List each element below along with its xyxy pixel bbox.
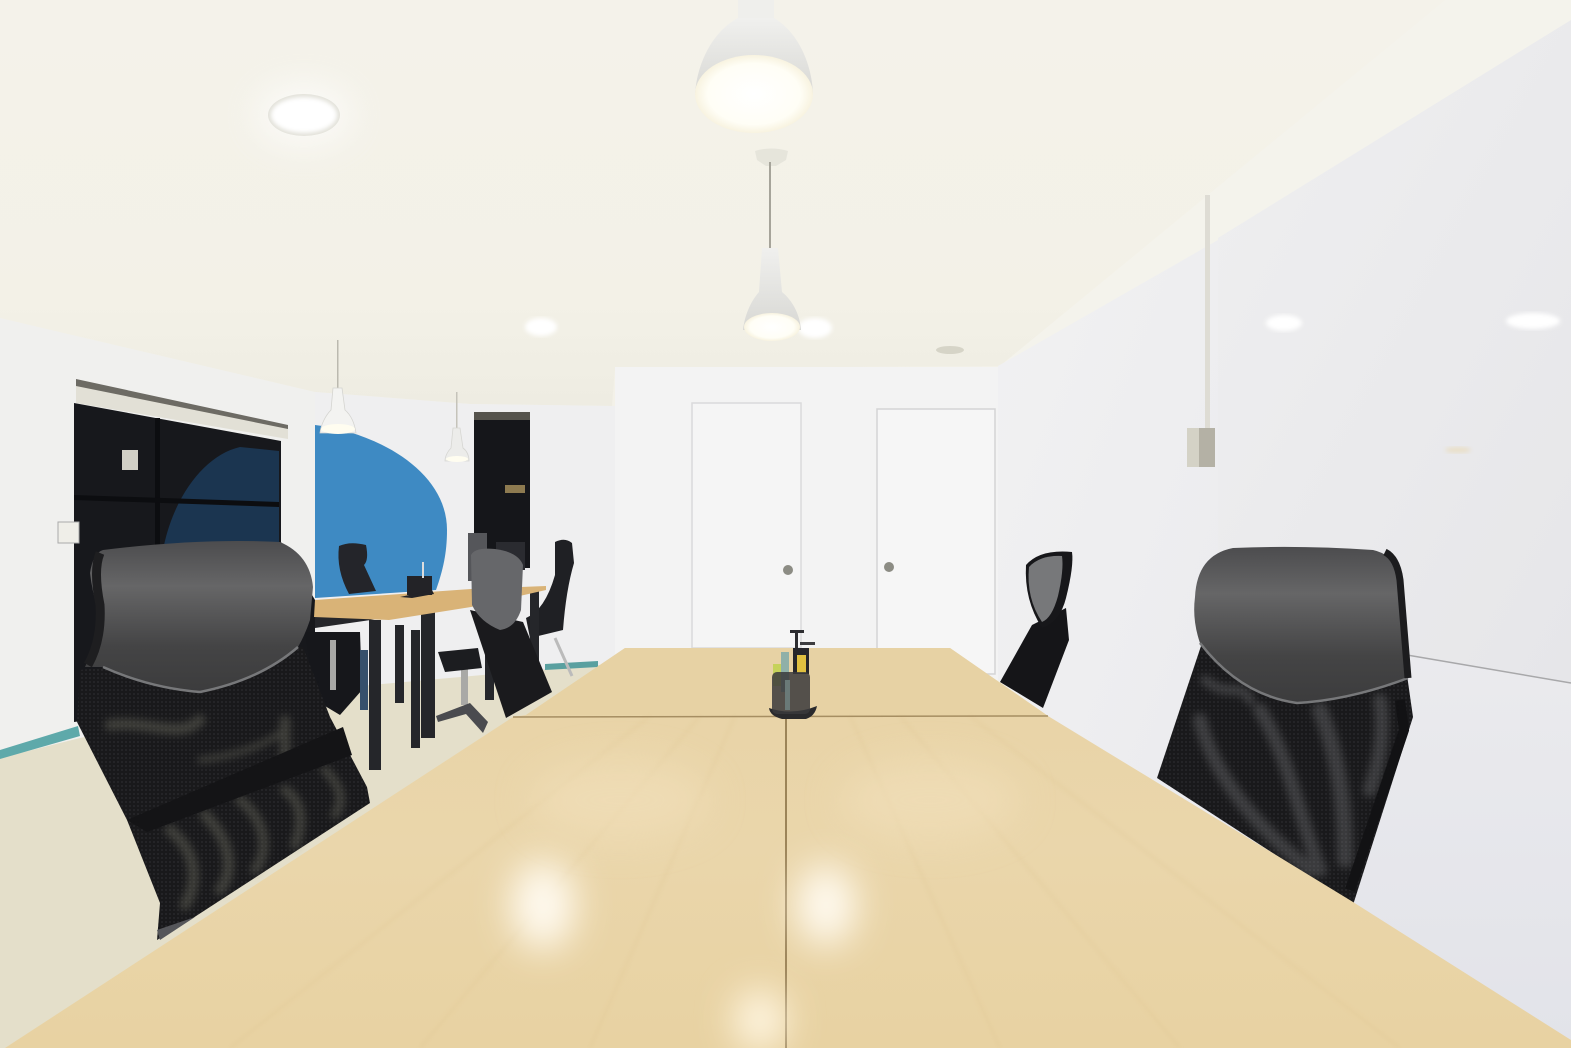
chair: near left [77, 541, 370, 940]
chair headrest rim [1200, 643, 1408, 703]
door: right [877, 409, 995, 674]
pendant lamp: rear [445, 392, 469, 462]
rear chair: right [526, 540, 574, 676]
whiteboard [1218, 20, 1571, 683]
pen holder: rear table [400, 562, 434, 598]
door: left [692, 403, 801, 648]
pendant lamp: left near [320, 340, 356, 434]
back wall with doors [615, 367, 998, 680]
pendant lamp: top [695, 0, 813, 133]
teal skirting [0, 726, 80, 759]
conduit and wall socket [1187, 195, 1215, 467]
chair headrest [1194, 547, 1408, 703]
rear left wall [315, 392, 615, 690]
chair: far right [1000, 552, 1072, 708]
left wall [0, 318, 315, 760]
table legs [315, 590, 539, 770]
whiteboard reflections [1266, 313, 1560, 453]
chair headrest side [1385, 552, 1408, 678]
rear table and chairs [305, 533, 574, 770]
floor [0, 665, 600, 1048]
pen holder [769, 630, 817, 719]
chair band [127, 727, 352, 832]
chair under table: left [305, 632, 368, 715]
rear table top [314, 586, 546, 620]
chair headrest [85, 541, 313, 692]
chair mesh back [77, 647, 370, 940]
chair: near right [1157, 547, 1413, 905]
lower right wall [1218, 622, 1571, 1048]
chair headrest rim [103, 647, 298, 692]
table joints [513, 716, 1048, 1048]
table reflections [511, 760, 1020, 1048]
right wall [998, 240, 1218, 860]
chair mesh back [1157, 640, 1413, 905]
table top [5, 648, 1571, 1048]
rear monitor and far chair [468, 533, 525, 581]
chair frame edge [1350, 700, 1404, 890]
chair mesh moire [110, 720, 340, 905]
ceiling spotlights [256, 85, 964, 354]
wood grain [230, 716, 1400, 1048]
rear chair: by blue wall [338, 543, 376, 594]
chair mesh moire [1200, 680, 1382, 870]
far table section [526, 648, 1048, 716]
chair foot [157, 917, 195, 940]
window: rear [474, 412, 530, 568]
blue wall shape [315, 425, 447, 598]
mid chair [470, 549, 552, 718]
rear skirting [545, 661, 598, 670]
mid chair base [436, 648, 488, 733]
chair headrest side [88, 553, 100, 665]
window: left [58, 379, 315, 722]
pendant lamp: centre [743, 148, 801, 341]
